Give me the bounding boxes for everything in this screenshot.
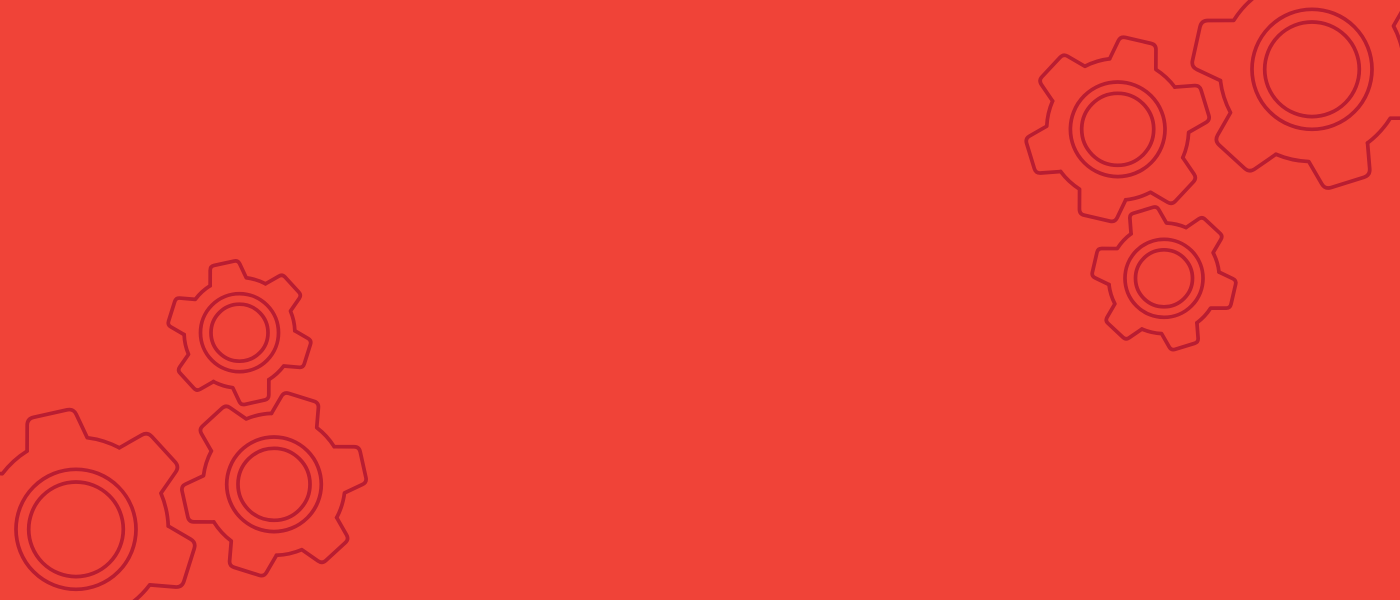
icon: medium gear top right xyxy=(1001,5,1235,254)
icon: medium gear bottom left xyxy=(163,365,385,600)
icon: small gear bottom left xyxy=(148,235,331,430)
icon: large gear top right xyxy=(1168,0,1400,224)
icon: small gear top right xyxy=(1077,185,1251,372)
icon: large gear bottom left xyxy=(0,367,229,600)
